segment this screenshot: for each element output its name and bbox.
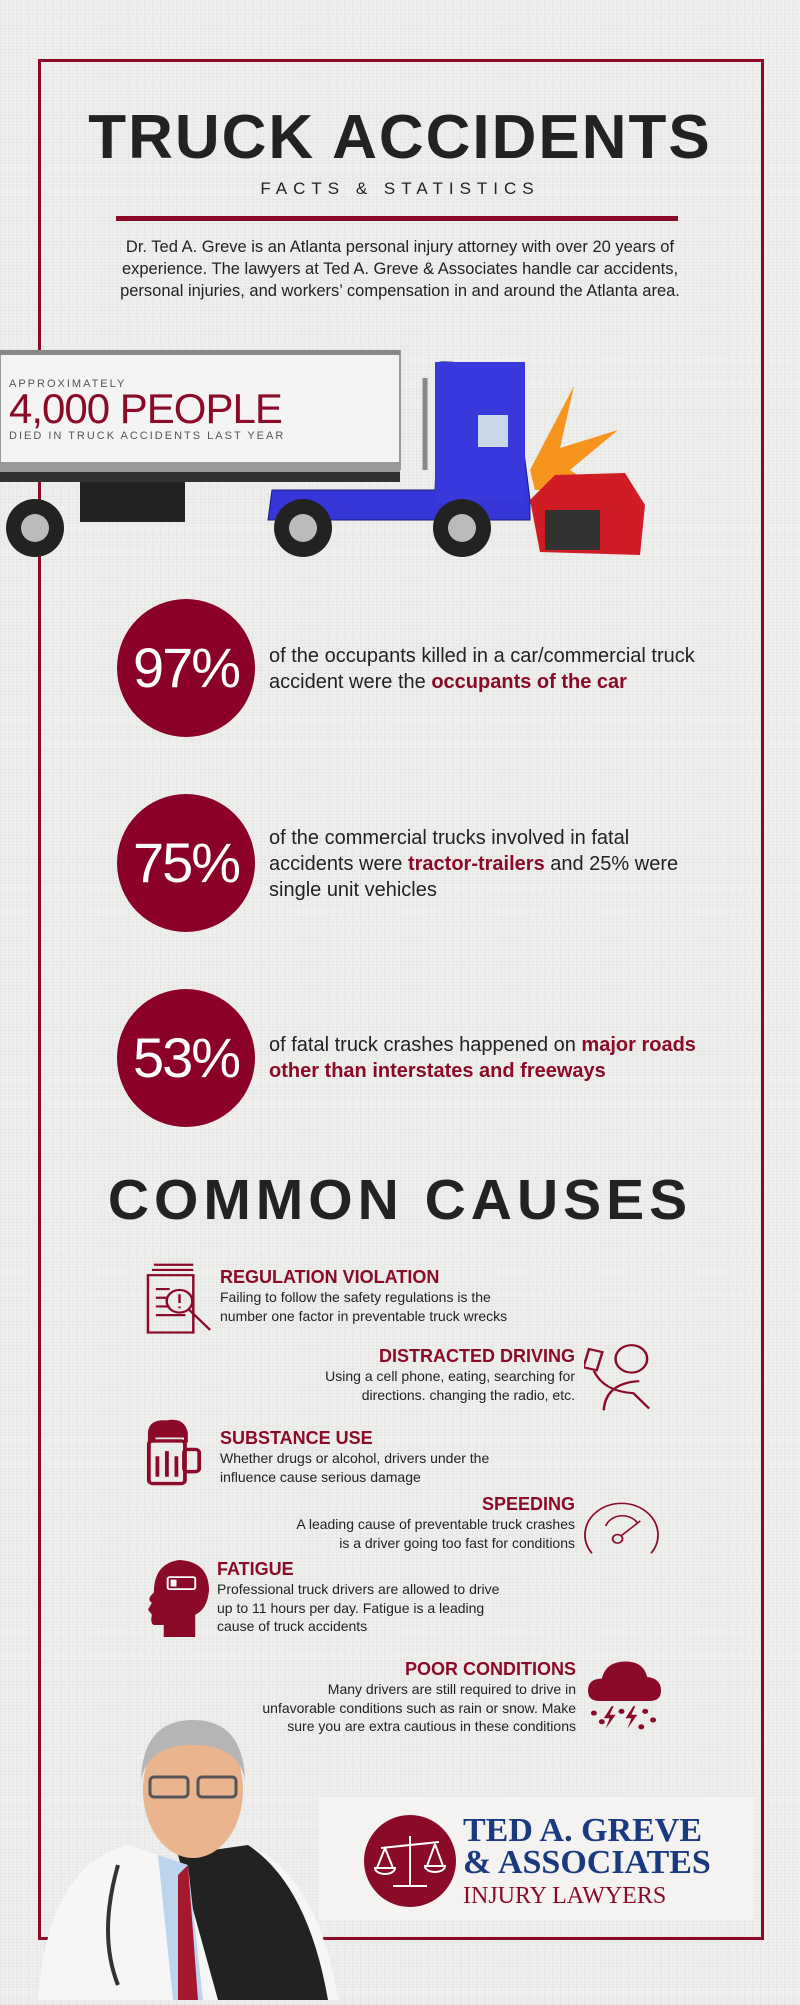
cause distracted: DISTRACTED DRIVING [379,1346,575,1366]
icon substance [146,1420,202,1486]
truck illustration [0,350,645,557]
cause distracted [325,1346,575,1403]
cause regulation: REGULATION VIOLATION [220,1267,439,1287]
intro paragraph [120,238,680,300]
cause fatigue [217,1559,499,1634]
stat 53: 53% [133,1026,239,1089]
icon distracted [584,1344,650,1410]
cause speeding: A leading cause of preventable truck crashes [296,1516,575,1532]
logo text: INJURY LAWYERS [463,1883,666,1909]
intro paragraph: experience. The lawyers at Ted A. Greve & Associates handle car accidents, [122,260,678,278]
cause distracted: Using a cell phone, eating, searching for [325,1368,575,1384]
stat 75 [117,794,255,932]
trailer text: DIED IN TRUCK ACCIDENTS LAST YEAR [9,430,285,442]
cause poor conditions: unfavorable conditions such as rain or snow. Make [262,1700,576,1716]
logo text [463,1812,711,1909]
cause poor conditions [262,1659,576,1734]
intro paragraph: personal injuries, and workers’ compensation in and around the Atlanta area. [120,282,680,300]
stat 75: 75% [133,831,239,894]
cause fatigue: FATIGUE [217,1559,294,1579]
stat 75 text: single unit vehicles [269,879,437,901]
cause speeding: SPEEDING [482,1494,575,1514]
stat 97 text: of the occupants killed in a car/commercial truck [269,645,695,667]
red rule [116,216,678,221]
logo box [319,1797,753,1920]
title: TRUCK ACCIDENTS [88,103,712,172]
logo seal [364,1815,456,1907]
logo text: TED A. GREVE [463,1812,702,1849]
icon speeding [584,1502,659,1554]
cause substance: SUBSTANCE USE [220,1428,373,1448]
cause substance: influence cause serious damage [220,1468,421,1484]
stat 53 text: of fatal truck crashes happened on major roads [269,1034,696,1056]
cause fatigue: up to 11 hours per day. Fatigue is a leading [217,1600,484,1616]
stat 97 text: accident were the occupants of the car [269,671,627,693]
trailer text: 4,000 PEOPLE [9,385,282,432]
cause fatigue: cause of truck accidents [217,1618,367,1634]
stat 53 text [269,1034,696,1082]
stat 75 text: accidents were tractor-trailers and 25% were [269,853,678,875]
icon regulation [146,1264,211,1334]
doctor portrait [38,1720,338,2000]
cause regulation: Failing to follow the safety regulations is the [220,1289,491,1305]
stat 97 text [269,645,695,693]
icon rain cloud [588,1662,661,1730]
stat 75 text [269,827,678,901]
stat 97: 97% [133,636,239,699]
cause fatigue: Professional truck drivers are allowed to drive [217,1581,499,1597]
intro paragraph: Dr. Ted A. Greve is an Atlanta personal injury attorney with over 20 years of [126,238,674,256]
cause distracted: directions. changing the radio, etc. [362,1386,575,1402]
cause regulation [220,1267,507,1324]
subtitle: FACTS & STATISTICS [260,179,540,198]
icon fatigue [148,1560,209,1637]
cause substance: Whether drugs or alcohol, drivers under the [220,1450,489,1466]
heading common causes: COMMON CAUSES [108,1168,692,1232]
logo text: & ASSOCIATES [463,1844,711,1881]
cause poor conditions: POOR CONDITIONS [405,1659,576,1679]
cause poor conditions: Many drivers are still required to drive in [328,1681,576,1697]
stat 75 text: of the commercial trucks involved in fatal [269,827,629,849]
trailer text: APPROXIMATELY [9,378,126,390]
stat 53 [117,989,255,1127]
cause speeding [296,1494,575,1551]
cause poor conditions: sure you are extra cautious in these conditions [287,1718,576,1734]
stat 97 [117,599,255,737]
stat 53 text: other than interstates and freeways [269,1060,606,1082]
cause regulation: number one factor in preventable truck wrecks [220,1308,507,1324]
cause speeding: is a driver going too fast for conditions [339,1534,575,1550]
cause substance [220,1428,489,1485]
